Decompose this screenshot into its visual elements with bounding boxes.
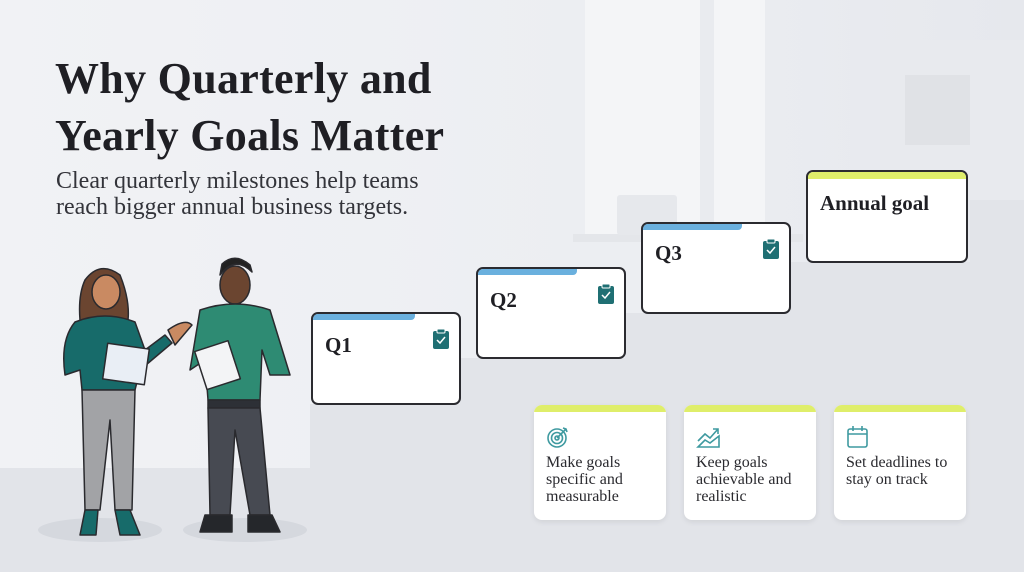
icon: calendar (847, 426, 868, 448)
tip: specific: measurable (546, 488, 619, 505)
icon: target (547, 427, 568, 448)
tip: deadlines: stay on track (846, 471, 928, 488)
card: Q1 (311, 312, 461, 405)
card: annual goal (806, 170, 968, 263)
icon: clipboard (763, 240, 779, 259)
tip: specific (534, 405, 666, 520)
icon: growth chart (696, 428, 720, 448)
icon: clipboard (598, 284, 614, 304)
title: Why Quarterly and (55, 54, 432, 103)
man (190, 258, 290, 532)
title (55, 54, 444, 160)
tip: achievable: realistic (696, 488, 747, 505)
tip: specific: Make goals (546, 454, 620, 471)
tip: achievable: achievable and (696, 471, 792, 488)
tip: achievable: Keep goals (696, 454, 768, 471)
card: annual goal: Annual goal (820, 191, 929, 215)
icon: clipboard (433, 330, 449, 349)
subtitle (56, 168, 419, 220)
illustration: two people (63, 258, 291, 536)
card: Q2: Q2 (490, 288, 517, 312)
tip: deadlines: Set deadlines to (846, 454, 947, 471)
subtitle: Clear quarterly milestones help teams (56, 168, 419, 194)
tip: achievable (684, 405, 816, 520)
subtitle: reach bigger annual business targets. (56, 194, 408, 220)
card: Q2 (476, 267, 626, 359)
card: Q3: Q3 (655, 241, 682, 265)
woman (64, 269, 192, 535)
card: Q1: Q1 (325, 333, 352, 357)
card: Q3 (641, 222, 791, 314)
tip: specific: specific and (546, 471, 623, 488)
tip: deadlines (834, 405, 966, 520)
title: Yearly Goals Matter (55, 111, 444, 160)
